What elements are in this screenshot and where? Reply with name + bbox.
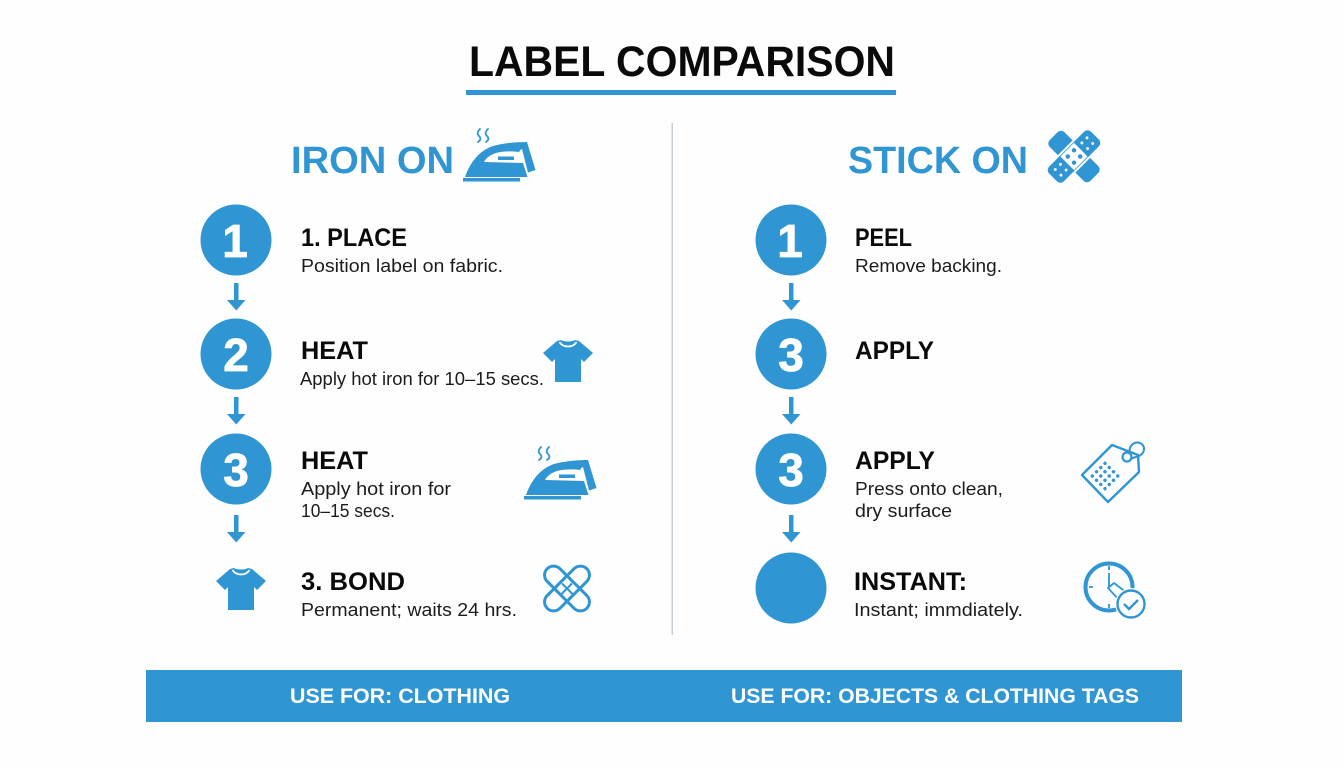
step 1 marker: 1	[222, 215, 248, 267]
step 1 text: Position label on fabric.	[301, 256, 503, 276]
step 4 marker	[756, 552, 826, 624]
heading: iron on	[291, 129, 536, 182]
step 1 marker: 1	[777, 215, 803, 267]
step 2 marker: 2	[223, 329, 249, 381]
panel: stick on	[756, 126, 1147, 623]
step 3 marker	[756, 434, 826, 504]
arrow	[227, 397, 246, 424]
step 4 text: Instant; immdiately.	[854, 600, 1023, 620]
step 3 text: Apply hot iron for	[301, 479, 451, 499]
step 4 text: INSTANT:	[854, 568, 967, 596]
title: LABEL COMPARISON	[469, 38, 895, 86]
step 3 marker: 3	[223, 444, 249, 496]
step 1 text	[855, 224, 1002, 276]
step 3 text: APPLY	[855, 447, 935, 475]
step 1 marker	[200, 204, 272, 276]
heading: stick on: STICK ON	[848, 140, 1028, 182]
step 2 marker	[200, 318, 272, 390]
icon: t-shirt	[543, 340, 593, 382]
footer bar: USE FOR: CLOTHING	[290, 685, 510, 708]
step 3 text	[301, 447, 451, 521]
step 2 text: APPLY	[855, 337, 934, 365]
icon: tag	[1082, 443, 1144, 502]
step 2 marker	[756, 318, 826, 390]
arrow	[782, 397, 800, 424]
step 2 marker: 3	[778, 329, 804, 381]
step 1 text: PEEL	[855, 224, 912, 252]
arrow	[227, 283, 246, 310]
step 3 text: dry surface	[855, 501, 952, 521]
panel: iron on	[200, 129, 596, 620]
arrow	[782, 283, 800, 310]
footer bar	[146, 670, 1182, 722]
step 4 text: Permanent; waits 24 hrs.	[301, 600, 517, 620]
icon: bond links	[541, 562, 593, 615]
step 1 text: 1. PLACE	[301, 224, 407, 252]
step 4 text	[854, 568, 1023, 620]
step 4 text	[301, 568, 517, 620]
step 3 marker	[200, 434, 272, 504]
icon: iron	[524, 447, 596, 500]
step 1 marker	[756, 204, 826, 276]
step 3 text: 10–15 secs.	[301, 501, 395, 521]
step 4 text: 3. BOND	[301, 568, 405, 596]
step 2 text: HEAT	[301, 337, 368, 365]
icon: t-shirt	[216, 568, 266, 610]
icon: bandage	[1044, 126, 1104, 187]
heading: stick on	[848, 126, 1104, 187]
icon: iron	[463, 129, 536, 182]
step 2 text: Apply hot iron for 10–15 secs.	[300, 369, 544, 389]
arrow	[782, 515, 800, 542]
arrow	[227, 515, 246, 542]
step 3 text: Press onto clean,	[855, 479, 1003, 499]
icon: clock with check	[1086, 564, 1147, 620]
step 3 text: HEAT	[301, 447, 368, 475]
footer bar: USE FOR: OBJECTS & CLOTHING TAGS	[731, 685, 1139, 708]
step 3 text	[855, 447, 1003, 521]
heading: iron on: IRON ON	[291, 140, 454, 182]
step 1 text	[301, 224, 503, 276]
divider	[672, 123, 673, 635]
step 1 text: Remove backing.	[855, 256, 1002, 276]
step 3 marker: 3	[778, 444, 804, 496]
step 2 text	[300, 337, 544, 389]
